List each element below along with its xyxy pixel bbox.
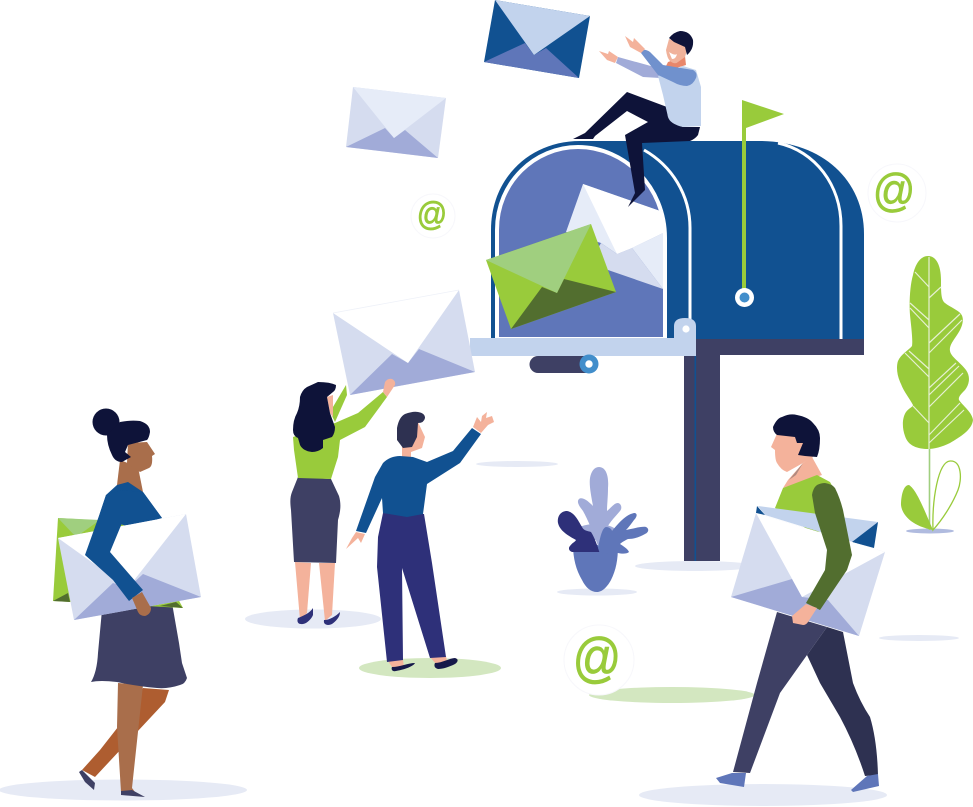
small outlined leaf: [933, 461, 960, 530]
person: man reaching up: [346, 412, 494, 671]
left hand: [346, 532, 365, 549]
shoes: [392, 658, 458, 671]
skirt: [91, 603, 187, 688]
mailbox post: [684, 350, 720, 561]
envelope: pale flying: [346, 87, 446, 158]
torso: [658, 66, 701, 127]
hair: [669, 31, 693, 55]
dark leaf: [558, 511, 600, 552]
back trouser leg: [807, 627, 878, 776]
upper leaf: [578, 467, 621, 548]
green envelope behind: [53, 518, 183, 608]
at-sign badge: small: [411, 194, 455, 238]
mailbox shelf and hinge tab: [470, 318, 696, 356]
mailbox flag: [735, 100, 784, 307]
small filled leaf: [901, 485, 933, 530]
shirt: [356, 428, 481, 533]
envelope held overhead: [333, 290, 475, 395]
mailbox body highlight lines: [644, 143, 841, 339]
stem: [928, 449, 930, 530]
hinge latch: [530, 354, 598, 374]
trousers: [377, 513, 446, 662]
neck: [783, 457, 822, 488]
pot: [573, 545, 618, 592]
head: [402, 420, 425, 457]
legs: [295, 562, 335, 621]
face: [666, 39, 687, 63]
face: [127, 442, 155, 472]
at-sign badge: upper right: [868, 164, 926, 222]
back arm: [330, 385, 347, 422]
far hand: [599, 51, 618, 63]
back envelope: [756, 506, 878, 548]
hair: [92, 408, 150, 462]
at-sign badge: large: @: [573, 626, 621, 688]
smile: [669, 52, 677, 59]
mailbox door opening: [497, 147, 665, 339]
at-sign badge: large: [564, 625, 634, 695]
face: [327, 395, 333, 417]
plant: large leaf: [897, 256, 973, 530]
plant: potted: [558, 467, 648, 592]
person: man walking with envelopes: [716, 414, 885, 792]
at-sign badge: upper right: @: [873, 165, 915, 216]
hand: [792, 604, 817, 625]
hair: [773, 414, 820, 457]
face: [771, 427, 813, 472]
blue leaf: [598, 513, 648, 554]
envelope: green in mailbox: [486, 224, 616, 329]
neck: [666, 56, 686, 68]
arm: [806, 483, 852, 610]
person: woman walking with envelopes: [53, 408, 201, 797]
shoes: [79, 770, 145, 797]
front trouser leg: [733, 612, 827, 773]
torso: [95, 482, 162, 530]
hair: [397, 412, 425, 448]
person: woman holding envelope overhead: [290, 290, 475, 625]
near arm: [641, 50, 697, 86]
white envelope carried: [58, 514, 201, 620]
far arm: [616, 57, 660, 78]
shoes: [297, 608, 340, 625]
front envelope: [731, 513, 885, 636]
pot back rim: [575, 524, 617, 540]
back leg: [82, 688, 169, 777]
skirt: [290, 477, 340, 563]
neck shadow: [789, 463, 803, 480]
arm: [85, 490, 143, 601]
mailbox dark base band: [696, 339, 864, 355]
trousers: [573, 92, 700, 207]
envelope: blue flying: [484, 0, 590, 78]
at-sign badge: small: @: [417, 194, 447, 232]
hand: [383, 379, 395, 397]
front leg: [117, 683, 143, 792]
leaf blade: [897, 256, 973, 449]
shirt: [775, 475, 840, 533]
torso and front arm: [293, 392, 387, 479]
mailbox body: [491, 141, 864, 339]
neck: [117, 460, 143, 492]
right hand: [473, 412, 494, 433]
shoulder to envelope fill: [122, 490, 162, 523]
mailbox: [470, 100, 864, 561]
shoes: [716, 773, 879, 792]
leaf veins: [905, 257, 964, 449]
envelope: white in mailbox: [566, 184, 663, 289]
person sitting on mailbox: [573, 31, 701, 207]
hinge hole: [682, 325, 690, 333]
ground shadows: [0, 461, 959, 806]
near hand: [625, 36, 645, 53]
hand: [132, 592, 151, 616]
hair: [293, 382, 336, 452]
ankles: [388, 656, 447, 667]
